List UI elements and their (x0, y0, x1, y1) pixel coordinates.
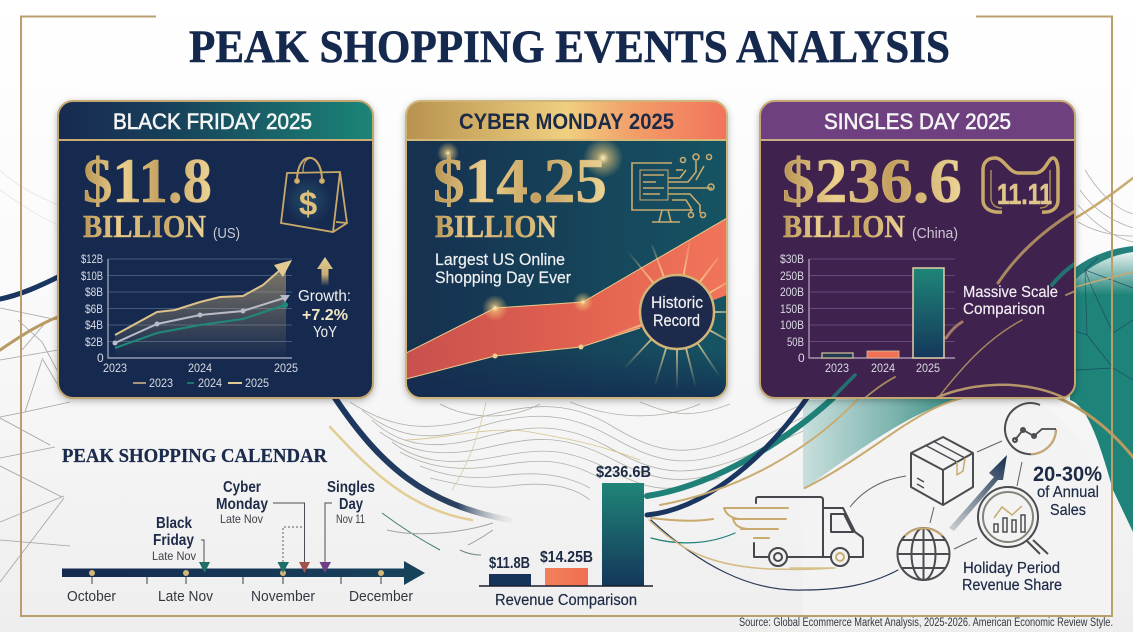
annual sales stat: 20-30% (1033, 463, 1102, 486)
network connectors (850, 441, 1022, 549)
line chart: 2023 (103, 361, 127, 375)
geometric lines left (0, 308, 70, 582)
white wave edge (803, 397, 1113, 616)
line chart: $2B (85, 335, 103, 349)
description (435, 250, 571, 287)
bar chart: 0 (798, 351, 805, 365)
annual sales stat: Sales (1050, 502, 1086, 519)
annual sales stat: of Annual (1037, 484, 1099, 501)
chart legend (133, 376, 269, 390)
bar chart: $30B (780, 252, 804, 266)
revenue comparison chart: Revenue Comparison (495, 592, 637, 609)
revenue comparison chart (479, 464, 653, 609)
timeline (62, 479, 425, 605)
growth callout: YoY (313, 324, 337, 341)
card heading: CYBER MONDAY 2025 (459, 109, 674, 134)
card background (760, 101, 1075, 398)
panel: black friday (58, 101, 373, 398)
line chart: 2024 (188, 361, 212, 375)
icon: globe (898, 528, 950, 580)
line chart: $8B (85, 285, 103, 299)
value: $14.25 (433, 146, 607, 216)
icon: trend circle (1005, 403, 1056, 454)
card border (406, 101, 727, 398)
chart legend: 2023 (149, 376, 173, 390)
month labels: December (349, 588, 413, 605)
bar chart: 150B (780, 302, 804, 316)
month labels: November (251, 588, 315, 605)
historic record badge (640, 275, 714, 349)
card background (406, 101, 727, 398)
icon: delivery truck (724, 497, 863, 568)
growth callout: +7.2% (302, 307, 348, 324)
growth callout (298, 288, 351, 341)
holiday revenue label: Holiday Period (963, 560, 1060, 577)
bar chart (780, 252, 955, 375)
card heading: BLACK FRIDAY 2025 (113, 109, 312, 134)
bar chart: 250B (780, 269, 804, 283)
historic record badge: Historic (651, 293, 703, 312)
icon: 11.11 logo (983, 158, 1058, 212)
event: cyber monday (216, 479, 310, 573)
panel: singles day (760, 101, 1085, 404)
revenue comparison chart: $236.6B (596, 464, 651, 481)
icon: computer circuit (632, 154, 714, 222)
arrow: growth up (317, 257, 333, 286)
line chart: $10B (81, 269, 103, 283)
bar chart: 50B (787, 335, 804, 349)
line chart: $6B (85, 302, 103, 316)
teal side wave (1070, 246, 1133, 532)
bar chart: 200B (780, 285, 804, 299)
revenue comparison chart: $11.8B (489, 555, 530, 572)
unit: BILLION (783, 208, 905, 244)
arrow: growth trend (949, 455, 1007, 531)
event: black friday: Black (156, 515, 192, 532)
line chart: $12B (81, 252, 103, 266)
holiday revenue label (962, 560, 1062, 594)
event: singles day: Singles (327, 479, 375, 496)
chart note: Comparison (963, 301, 1045, 318)
event: cyber monday: Late Nov (220, 512, 263, 526)
growth callout: Growth: (298, 288, 351, 305)
holiday revenue label: Revenue Share (962, 577, 1062, 594)
month labels: Late Nov (158, 588, 213, 605)
card header band (58, 101, 373, 141)
annual sales stat (1033, 463, 1102, 519)
card heading: SINGLES DAY 2025 (824, 109, 1011, 134)
value: $11.8 (83, 146, 212, 216)
icon: shopping bag: $ (299, 185, 317, 222)
unit: BILLION (83, 208, 206, 244)
card background (58, 101, 373, 398)
title: PEAK SHOPPING EVENTS ANALYSIS (189, 21, 950, 73)
line chart (81, 252, 298, 375)
teal wave background (803, 396, 1075, 490)
event: singles day: Nov 11 (336, 512, 365, 526)
bar chart: 2024 (871, 361, 895, 375)
historic record badge: Record (653, 311, 700, 330)
timeline arrow (62, 561, 425, 585)
line chart: 0 (97, 351, 104, 365)
flowing ribbons (0, 178, 1133, 590)
region: (US) (213, 225, 240, 242)
line chart: $4B (85, 318, 103, 332)
line chart: 2025 (274, 361, 298, 375)
contour line pattern (0, 170, 1133, 555)
month labels: October (67, 588, 116, 605)
chart note: Massive Scale (963, 284, 1058, 301)
chart legend: 2025 (245, 376, 269, 390)
event: cyber monday: Cyber (223, 479, 261, 496)
card header band (760, 101, 1085, 404)
bar chart: 2025 (916, 361, 940, 375)
region: (China) (912, 225, 958, 242)
event: black friday: Friday (153, 532, 194, 549)
network lines on teal (1040, 258, 1133, 380)
value: $236.6 (782, 146, 962, 216)
icon: magnifier with chart (978, 487, 1048, 554)
event: singles day: Day (339, 496, 363, 513)
event: black friday (152, 515, 210, 573)
event: cyber monday: Monday (216, 496, 268, 513)
event: black friday: Late Nov (152, 549, 196, 563)
description: Largest US Online (435, 250, 565, 269)
header and artwork (406, 101, 757, 398)
icon: parcel box (911, 437, 973, 505)
teal arc band (1050, 246, 1133, 296)
panel: cyber monday (406, 101, 757, 398)
icon: 11.11 logo: 11.11 (997, 179, 1052, 211)
description: Shopping Day Ever (435, 268, 571, 287)
icon: shopping bag (281, 158, 347, 232)
chart legend: 2024 (198, 376, 222, 390)
bar chart: 2023 (825, 361, 849, 375)
month labels (67, 588, 413, 605)
revenue comparison chart: $14.25B (540, 549, 593, 566)
unit: BILLION (435, 208, 557, 244)
card border (58, 101, 373, 398)
bar chart: 100B (780, 318, 804, 332)
card border (760, 101, 1075, 398)
event: singles day (320, 479, 375, 573)
chart note (963, 284, 1058, 318)
calendar heading: PEAK SHOPPING CALENDAR (62, 445, 328, 467)
